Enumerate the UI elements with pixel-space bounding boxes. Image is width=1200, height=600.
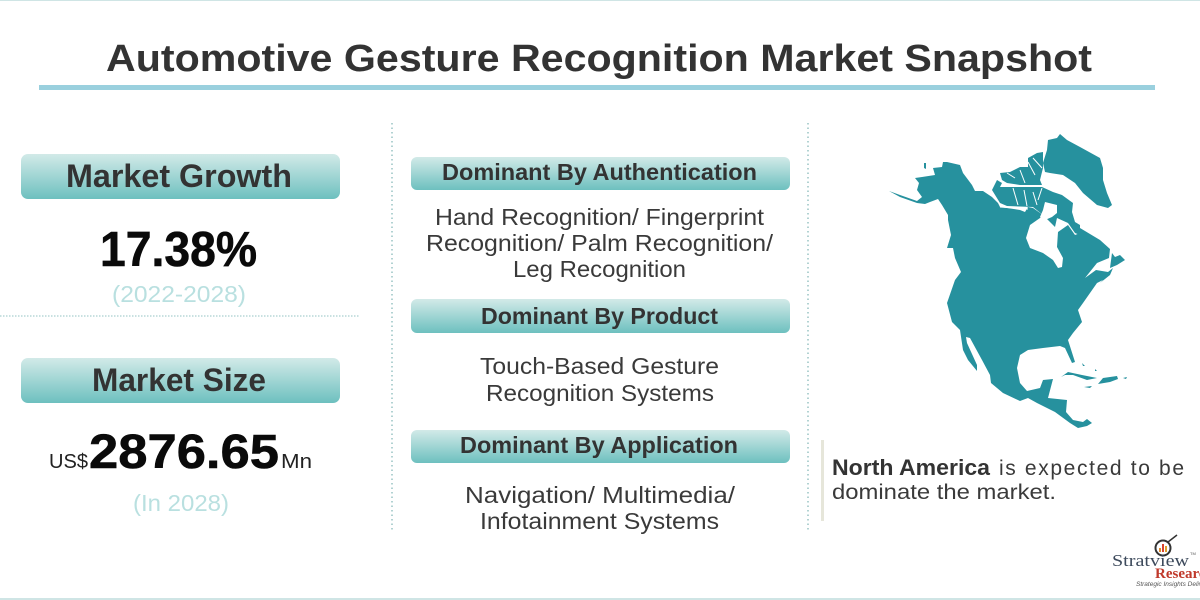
heading: product	[411, 299, 790, 333]
heading: product: Dominant By Product	[481, 303, 718, 329]
heading: application	[411, 430, 790, 463]
growth value: 17.38%	[100, 223, 257, 277]
text: product types: Recognition Systems	[486, 380, 714, 406]
size year: (In 2028)	[133, 490, 229, 516]
logo: stratview research: TM	[1190, 551, 1196, 556]
size value	[49, 426, 312, 479]
title: Automotive Gesture Recognition Market Snapshot	[106, 38, 1092, 80]
text: authentication types: Hand Recognition/ Fingerprint	[435, 204, 765, 230]
logo: stratview research	[1112, 535, 1200, 588]
size value: US$	[49, 451, 88, 473]
heading: market size	[21, 358, 340, 403]
heading: market growth: Market Growth	[66, 158, 292, 194]
panel: dominant by application	[411, 430, 790, 534]
panel: dominant by authentication	[411, 157, 790, 282]
heading: authentication: Dominant By Authentication	[442, 159, 757, 185]
heading: application: Dominant By Application	[460, 432, 738, 458]
heading: market growth	[21, 154, 340, 199]
panel: market size	[21, 358, 340, 516]
callout: north america: dominate the market.	[832, 481, 1056, 504]
text: product types: Touch-Based Gesture	[480, 353, 719, 379]
text: authentication types: Recognition/ Palm Recognition/	[426, 230, 774, 256]
panel: market growth	[21, 154, 340, 307]
text: application types: Infotainment Systems	[480, 508, 719, 534]
panel: dominant by product	[411, 299, 790, 406]
map: north america	[889, 134, 1127, 428]
growth period: (2022-2028)	[112, 281, 246, 307]
icon: magnifier chart	[1156, 535, 1177, 556]
text: application types	[465, 482, 736, 534]
callout: north america	[821, 440, 1184, 521]
text: product types	[480, 353, 719, 406]
heading: authentication	[411, 157, 790, 190]
title	[39, 38, 1155, 90]
logo: stratview research: Stratview	[1112, 551, 1190, 570]
size value: 2876.65	[89, 426, 279, 479]
text: application types: Navigation/ Multimedia/	[465, 482, 736, 508]
text: authentication types: Leg Recognition	[513, 256, 686, 282]
text: authentication types	[426, 204, 774, 282]
callout: north america: is expected to be	[999, 457, 1184, 480]
size value: Mn	[281, 451, 312, 473]
callout: north america: North America	[832, 455, 991, 480]
heading: market size: Market Size	[92, 362, 266, 398]
